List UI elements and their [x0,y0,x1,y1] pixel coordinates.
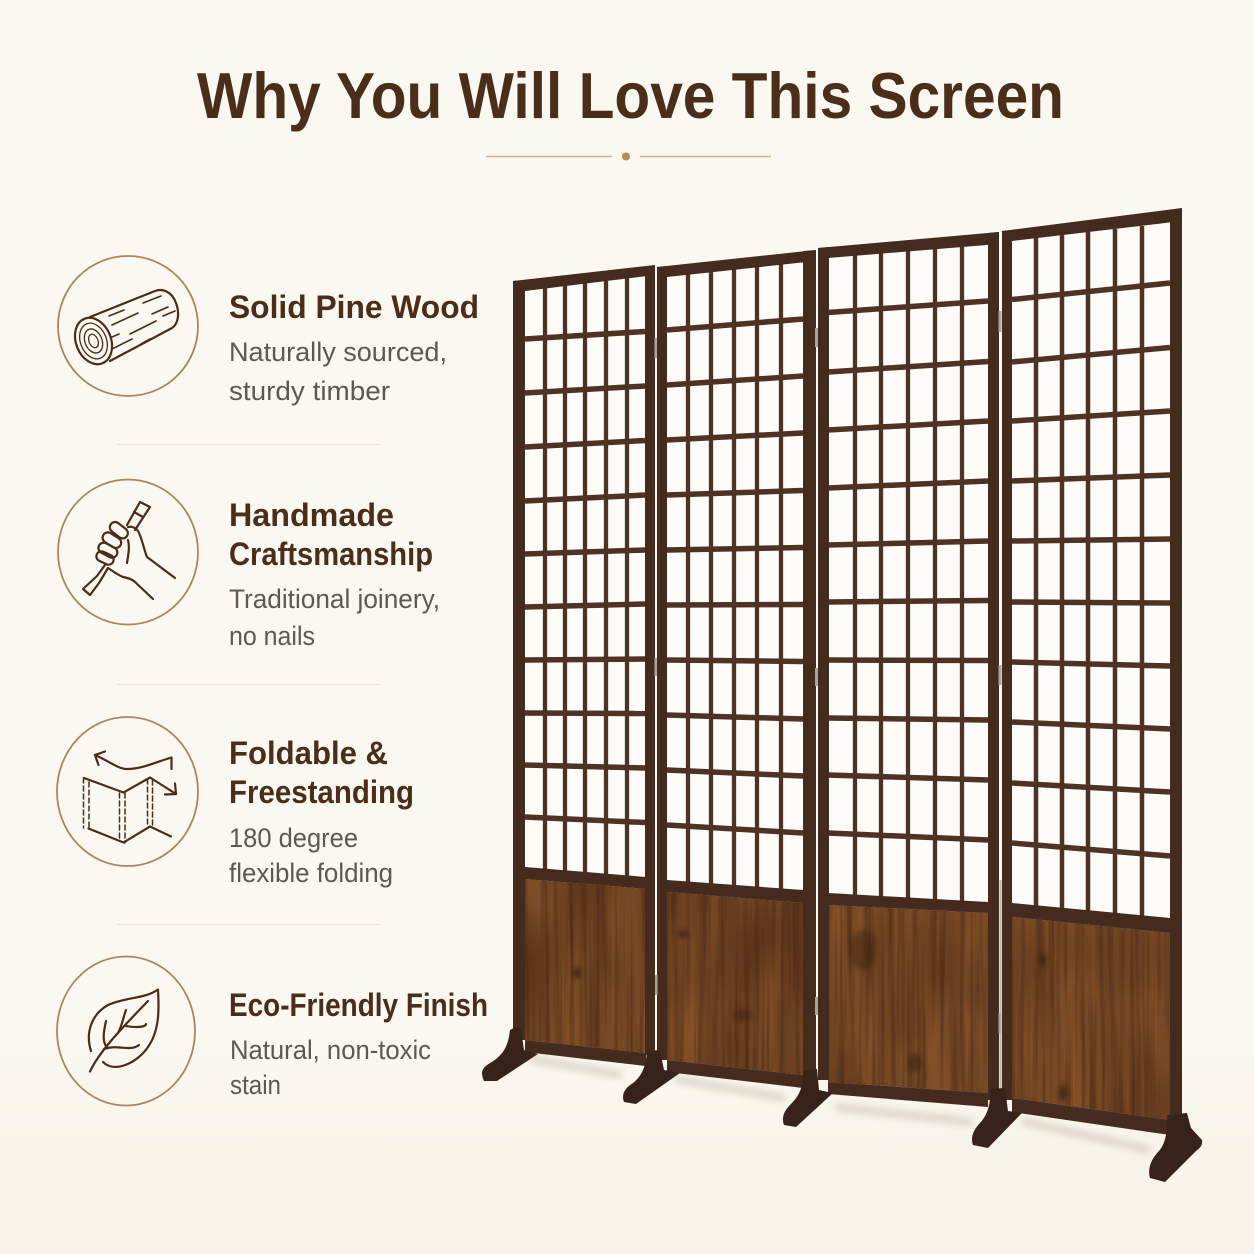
description: flexible folding [229,858,393,888]
panel 2 [657,250,816,1088]
heading: Solid Pine Wood [229,289,479,325]
hinges [654,311,1002,1095]
folding room divider screen [482,208,1202,1182]
description [229,823,393,888]
description: stain [230,1070,281,1100]
feet [482,1028,1202,1182]
heading: Handmade [229,497,394,533]
feature: handmade craftsmanship [58,480,440,651]
heading: Foldable & [229,735,388,771]
panel 3 [818,232,999,1107]
description: 180 degree [229,823,358,853]
description: Traditional joinery, [229,584,440,614]
floor shadows [530,1056,1150,1153]
icon: leaf [57,956,195,1106]
panel 1 [513,265,655,1066]
description [230,1035,431,1100]
icon: folding screen with arrows [57,717,198,866]
icon: hand with chisel [58,480,198,624]
heading [229,735,414,810]
heading: Craftsmanship [229,536,433,572]
panel 4 [1002,208,1182,1135]
description: Natural, non-toxic [230,1035,431,1065]
icon: log [58,256,198,396]
feature: eco-friendly finish [57,956,488,1106]
feature: foldable and freestanding [57,717,414,888]
heading: Eco-Friendly Finish [229,987,488,1023]
description [229,337,447,406]
heading: Freestanding [229,774,414,810]
description: sturdy timber [229,376,390,406]
description: Naturally sourced, [229,337,447,367]
description: no nails [229,621,315,651]
heading [229,497,433,572]
title ornament divider [486,152,771,160]
feature: solid pine wood [58,256,479,406]
title: Why You Will Love This Screen [197,59,1064,132]
description [229,584,440,651]
